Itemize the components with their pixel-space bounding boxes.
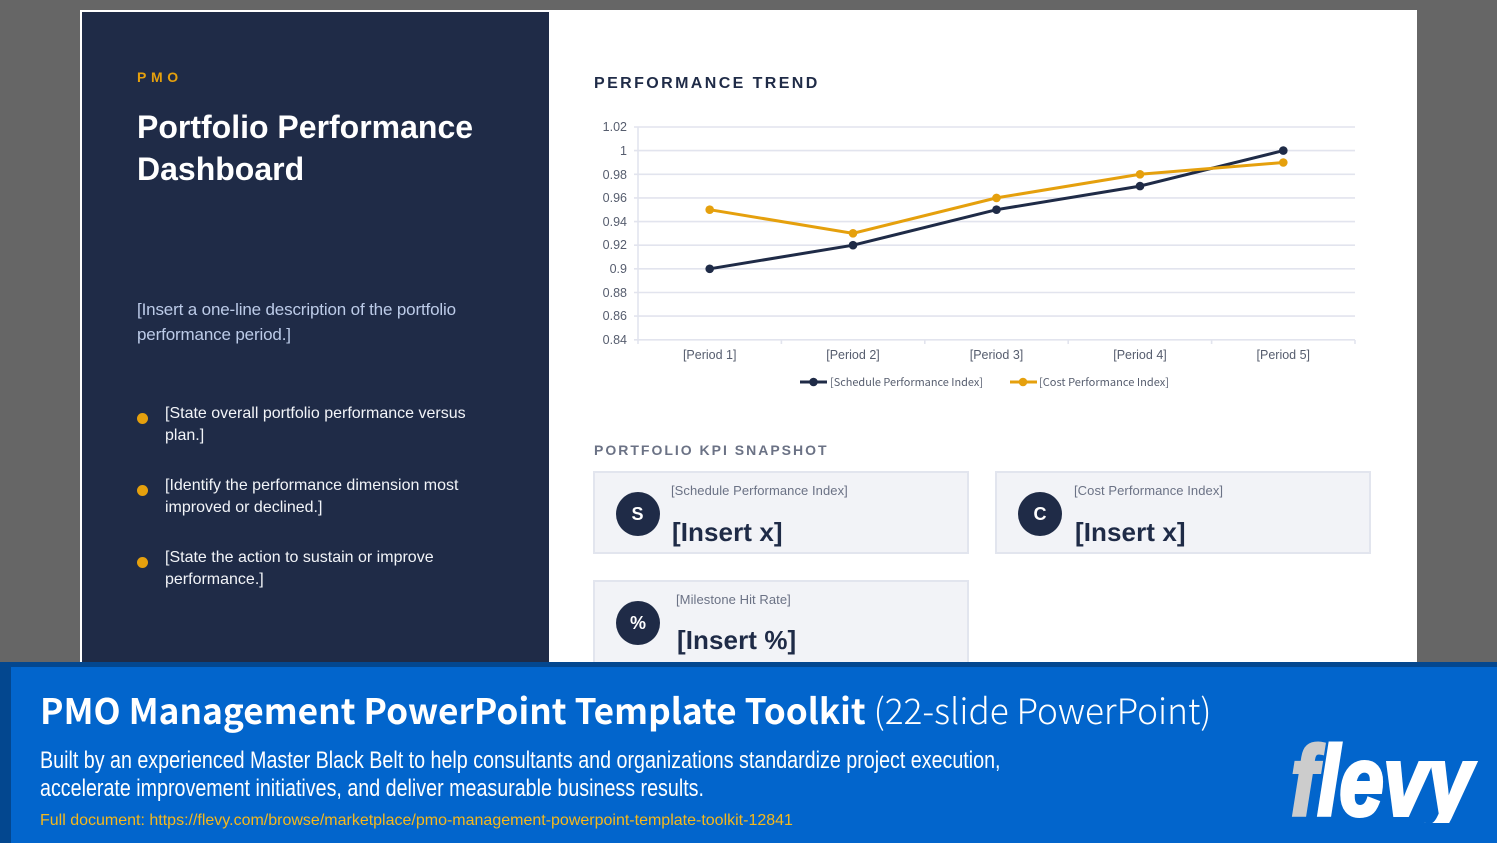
y axis labels: 0.9 xyxy=(610,262,627,276)
y axis labels: 1 xyxy=(620,144,627,158)
slide background xyxy=(80,10,1417,670)
footer title: PMO Management PowerPoint Template Toolkit (22-slide PowerPoint) xyxy=(40,684,1211,735)
description: [Insert a one-line description of the portfolio xyxy=(137,300,456,319)
y axis labels: 0.84 xyxy=(603,333,627,347)
title: Portfolio Performance xyxy=(137,109,473,145)
x axis labels: [Period 4] xyxy=(1113,348,1167,362)
bullet 3 text: performance.] xyxy=(165,571,264,588)
bullet 3 text xyxy=(165,549,434,588)
heading: portfolio KPI snapshot: PORTFOLIO KPI SNAPSHOT xyxy=(594,442,829,458)
title xyxy=(137,109,473,187)
bullet 3 text: [State the action to sustain or improve xyxy=(165,549,434,566)
bullet 2 dot xyxy=(137,485,148,496)
line chart: performance trend xyxy=(603,120,1356,390)
icon: percent badge: % xyxy=(630,613,646,633)
KPI label: [Cost Performance Index] xyxy=(1074,483,1223,498)
x axis labels xyxy=(683,348,1310,362)
legend: [Schedule Performance Index] xyxy=(830,375,983,390)
bullet 2 text: [Identify the performance dimension most xyxy=(165,477,458,494)
heading: performance trend: PERFORMANCE TREND xyxy=(594,75,820,92)
panel: left navy sidebar xyxy=(82,12,549,662)
series: cost performance index xyxy=(705,158,1288,238)
bullet 3 dot xyxy=(137,557,148,568)
y axis labels: 0.94 xyxy=(603,215,627,229)
description: performance period.] xyxy=(137,325,291,344)
KPI label: [Schedule Performance Index] xyxy=(671,483,848,498)
KPI card: cost performance index xyxy=(995,471,1371,554)
KPI card: milestone hit rate xyxy=(593,580,969,670)
bullet list xyxy=(137,405,466,588)
KPI value: [Insert x] xyxy=(1075,517,1186,547)
icon: C badge xyxy=(1018,492,1062,536)
footer link: Full document: https://flevy.com/browse/marketplace/pmo-management-powerpoint-template-toolkit-12841 xyxy=(40,812,793,829)
bullet 1 dot xyxy=(137,413,148,424)
footer description: Built by an experienced Master Black Belt to help consultants and organizations standardize project execution, xyxy=(40,747,1001,774)
legend xyxy=(800,375,1169,390)
icon: C badge: C xyxy=(1034,504,1046,524)
footer description xyxy=(40,747,1001,802)
y axis labels: 0.98 xyxy=(603,168,627,182)
KPI label: [Milestone Hit Rate] xyxy=(676,592,791,607)
bullet 2 text xyxy=(165,477,458,516)
y axis labels: 0.86 xyxy=(603,309,627,323)
title: Dashboard xyxy=(137,151,304,187)
footer main panel xyxy=(11,667,1497,843)
KPI card: schedule performance index xyxy=(593,471,969,554)
icon: S badge: S xyxy=(631,504,644,524)
y axis labels: 0.96 xyxy=(603,191,627,205)
footer banner xyxy=(0,662,1497,843)
bullet 2 text: improved or declined.] xyxy=(165,499,322,516)
x axis labels: [Period 3] xyxy=(970,348,1023,362)
description xyxy=(137,300,456,344)
y axis labels: 1.02 xyxy=(603,120,627,134)
bullet 1 text xyxy=(165,405,466,444)
y axis labels: 0.92 xyxy=(603,238,627,252)
icon: S badge xyxy=(616,492,660,536)
KPI value: [Insert %] xyxy=(677,625,796,655)
legend: [Cost Performance Index] xyxy=(1039,375,1169,390)
bullet 1 text: plan.] xyxy=(165,427,204,444)
footer description: accelerate improvement initiatives, and deliver measurable business results. xyxy=(40,775,704,802)
series: schedule performance index xyxy=(705,146,1288,273)
icon: percent badge xyxy=(616,601,660,645)
KPI value: [Insert x] xyxy=(672,517,783,547)
y axis labels xyxy=(603,120,627,347)
x axis labels: [Period 2] xyxy=(826,348,880,362)
eyebrow label: PMO xyxy=(137,69,183,85)
x axis labels: [Period 1] xyxy=(683,348,736,362)
bullet 1 text: [State overall portfolio performance versus xyxy=(165,405,466,422)
y axis labels: 0.88 xyxy=(603,286,627,300)
x axis labels: [Period 5] xyxy=(1257,348,1310,362)
